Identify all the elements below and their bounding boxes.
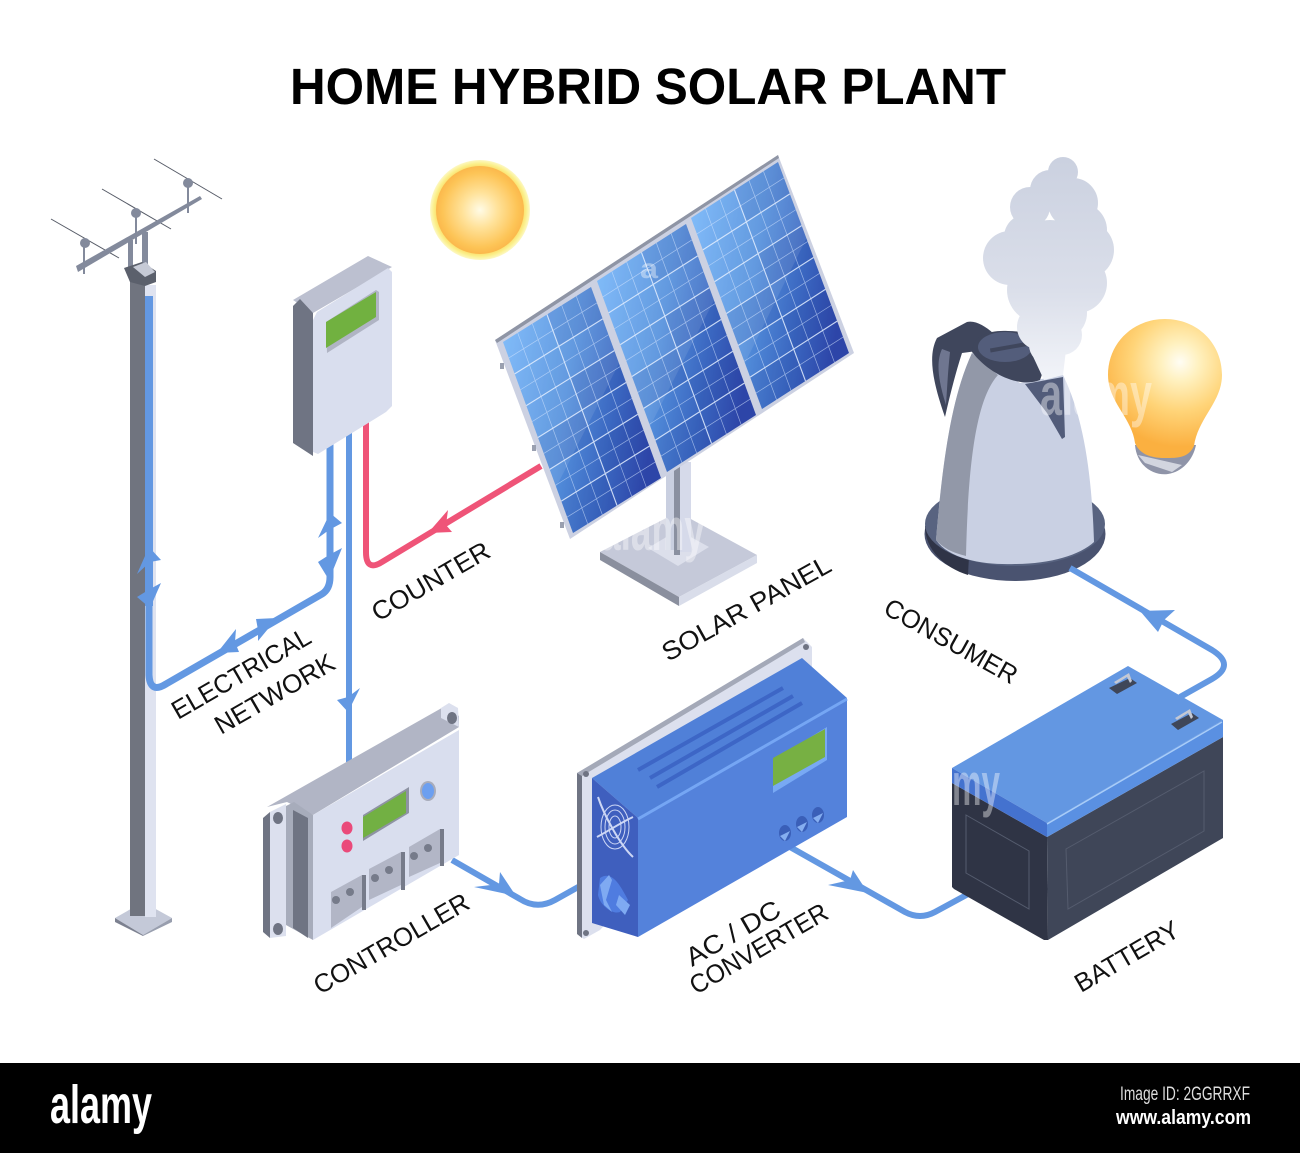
controller screen	[363, 787, 409, 841]
icon: kettle	[924, 322, 1106, 581]
watermark overlays: alamy	[1040, 361, 1152, 428]
controller top	[267, 705, 459, 815]
connector: electrical network to counter	[149, 440, 330, 687]
battery lid	[952, 666, 1223, 837]
icon: battery	[952, 666, 1223, 940]
frame bolts	[500, 363, 564, 528]
kettle side stripe	[936, 353, 998, 556]
arrows on converter lines	[474, 610, 1175, 896]
stand base	[600, 512, 757, 606]
label: electrical network: ELECTRICAL	[166, 621, 316, 725]
converter front	[638, 698, 847, 937]
image id: Image ID: 2GGRRXF	[1120, 1084, 1250, 1105]
controller flange	[263, 804, 286, 938]
connector: battery to kettle	[1070, 568, 1224, 697]
battery panel insets	[966, 771, 1204, 909]
watermark overlays: a	[640, 253, 658, 284]
terminal 2	[1171, 709, 1199, 730]
panel modules	[503, 162, 849, 533]
kettle body	[936, 353, 1094, 564]
label: battery: BATTERY	[1069, 914, 1184, 998]
crossarm	[76, 178, 202, 274]
converter screen	[773, 727, 827, 793]
icon: solar panel	[495, 155, 854, 606]
icon: electricity pole	[51, 159, 222, 936]
battery front side	[1047, 737, 1223, 940]
footer logo: alamy	[50, 1075, 152, 1135]
mounting holes	[273, 712, 457, 935]
controller front	[313, 730, 459, 940]
bulb socket	[1135, 445, 1196, 474]
arrows on network line	[137, 513, 360, 712]
counter screen	[326, 290, 379, 353]
fan 2	[598, 875, 630, 915]
watermark overlays	[600, 253, 1152, 818]
buttons	[779, 807, 824, 841]
panel frame	[495, 155, 854, 539]
icon: light bulb	[1108, 319, 1222, 474]
mounting plate	[577, 638, 812, 939]
title: HOME HYBRID SOLAR PLANT	[290, 58, 1006, 115]
watermark overlays: alamy	[600, 496, 705, 563]
kettle handle	[932, 322, 993, 417]
connector: converter to battery	[790, 847, 970, 916]
label: counter: COUNTER	[366, 535, 495, 627]
connector: solar panel to counter	[366, 422, 541, 565]
controller side	[286, 802, 313, 940]
vents	[638, 688, 802, 787]
battery left side	[952, 783, 1048, 940]
sun	[430, 160, 530, 260]
pole shaft	[130, 278, 156, 917]
label: AC / DC converter: CONVERTER	[684, 897, 833, 1000]
fan 1	[597, 797, 633, 857]
icon: counter meter	[293, 256, 392, 456]
footer bar	[0, 1063, 1300, 1153]
label: consumer: CONSUMER	[879, 592, 1023, 690]
footer url: www.alamy.com	[1115, 1107, 1251, 1129]
indicator lights	[342, 822, 352, 852]
connector: counter to controller	[346, 430, 352, 762]
plate screws	[583, 644, 809, 936]
pole cap	[124, 262, 156, 286]
converter side	[592, 778, 638, 937]
icon: controller	[263, 703, 459, 940]
kettle lid	[972, 331, 1048, 382]
label: controller: CONTROLLER	[308, 887, 475, 1000]
wires	[51, 159, 222, 258]
label: electrical network: NETWORK	[209, 647, 341, 740]
arrow: red	[428, 510, 452, 533]
steam	[983, 157, 1114, 380]
label: solar panel: SOLAR PANEL	[656, 549, 836, 667]
terminals	[331, 829, 444, 928]
label: AC / DC converter: AC / DC	[680, 894, 786, 972]
kettle spout	[1025, 377, 1065, 439]
button	[420, 781, 436, 801]
converter top	[592, 658, 847, 818]
terminal 1	[1109, 673, 1137, 694]
pole base	[115, 902, 172, 936]
icon: AC / DC converter	[577, 638, 847, 939]
stand post	[666, 462, 691, 555]
connector: controller to converter	[452, 860, 580, 905]
kettle base	[924, 482, 1106, 581]
watermark overlays: my	[952, 751, 1000, 818]
bulb glass	[1108, 319, 1222, 458]
